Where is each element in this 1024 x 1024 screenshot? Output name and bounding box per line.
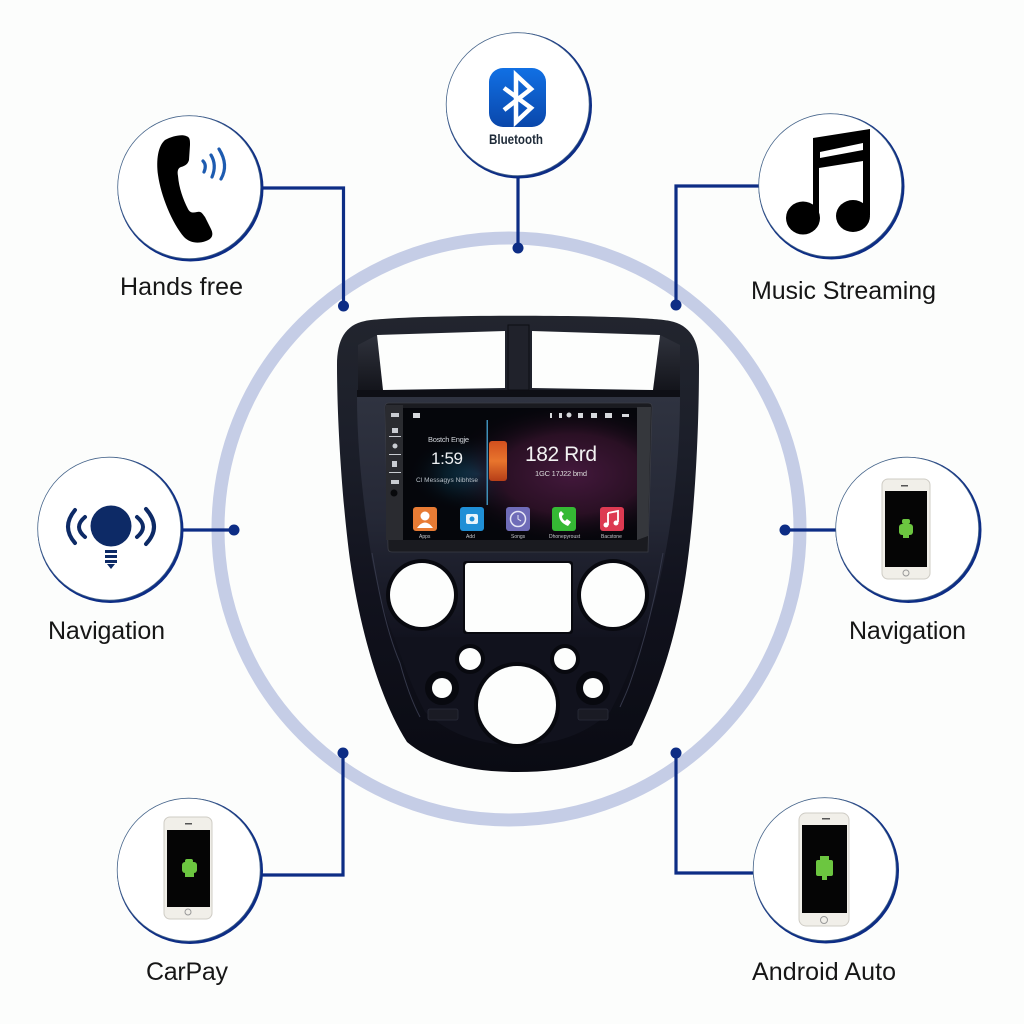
centre art — [489, 441, 507, 481]
app icon: clock — [506, 507, 530, 531]
head unit screen: 182 Rrd — [525, 443, 597, 466]
inner bezel — [357, 397, 680, 637]
screen readouts: Bostch Engje — [428, 435, 469, 444]
icon: smartphone android — [882, 479, 930, 579]
badge: carpay — [117, 798, 263, 944]
divider light — [486, 420, 488, 505]
lower ridge highlights — [372, 553, 663, 717]
bluetooth caption: Bluetooth — [489, 131, 543, 147]
label: music streaming: Music Streaming — [751, 277, 936, 305]
connector: hands free — [261, 188, 349, 312]
label: navigation left: Navigation — [48, 617, 165, 645]
upper vent left window — [377, 331, 505, 390]
badge: navigation right — [836, 457, 982, 603]
app labels: Apps — [419, 534, 431, 540]
badge: hands free — [118, 116, 264, 262]
app labels: Add — [466, 534, 475, 540]
badge: bluetooth — [446, 32, 592, 178]
head unit screen — [385, 403, 652, 552]
icon: music notes — [813, 129, 870, 218]
screen display — [403, 408, 637, 540]
connector: bluetooth — [512, 176, 524, 254]
status bar — [413, 412, 629, 418]
app icon: phone — [552, 507, 576, 531]
connector: music streaming — [670, 186, 760, 310]
app labels: Bacstone — [601, 534, 622, 540]
connector: navigation right — [780, 524, 836, 536]
label: navigation right: Navigation — [849, 617, 966, 645]
icon: signal waves — [203, 149, 225, 179]
connector: carplay — [261, 748, 348, 875]
panel: car dash fascia — [337, 316, 699, 772]
app labels: Dhonepyroust — [549, 534, 581, 540]
app icon: contacts — [413, 507, 437, 531]
badge: music streaming — [758, 114, 904, 260]
centre pillar — [508, 325, 529, 390]
label: hands free: Hands free — [120, 273, 243, 301]
app icon: radio — [460, 507, 484, 531]
fascia body — [337, 316, 699, 772]
icon: phone handset — [157, 135, 212, 243]
head unit screen: 1:59 — [431, 449, 463, 468]
label: android auto: Android Auto — [752, 958, 896, 986]
icon: bluetooth logo — [489, 68, 546, 127]
inner lower shading — [394, 637, 642, 745]
left vent column — [358, 335, 383, 397]
app icon: music — [600, 507, 624, 531]
app labels — [419, 534, 622, 540]
bezel right strip — [637, 407, 651, 540]
label: carpay: CarPay — [146, 958, 228, 986]
side buttons — [389, 413, 401, 496]
right vent column — [653, 335, 680, 397]
badge: navigation left — [38, 457, 184, 603]
icon: smartphone carplay — [164, 817, 212, 919]
icon: bulb beacon — [68, 506, 154, 569]
app labels: Songs — [511, 534, 526, 540]
connector: android auto — [670, 748, 754, 873]
screen bezel — [385, 403, 652, 552]
central ring — [218, 238, 800, 820]
connector: navigation left — [182, 524, 240, 536]
icon: smartphone android auto — [799, 813, 849, 926]
bezel left strip — [386, 405, 403, 540]
badge: android auto — [753, 798, 899, 944]
lower holes surrounds — [386, 559, 649, 748]
upper vent right window — [532, 331, 660, 390]
head unit screen: 1GC 17J22 bmd — [535, 469, 587, 478]
switch buttons — [428, 709, 608, 720]
vent ledge — [357, 390, 680, 397]
lower holes — [390, 563, 645, 744]
head unit screen: Cl Messagys Nibhtse — [416, 477, 478, 484]
